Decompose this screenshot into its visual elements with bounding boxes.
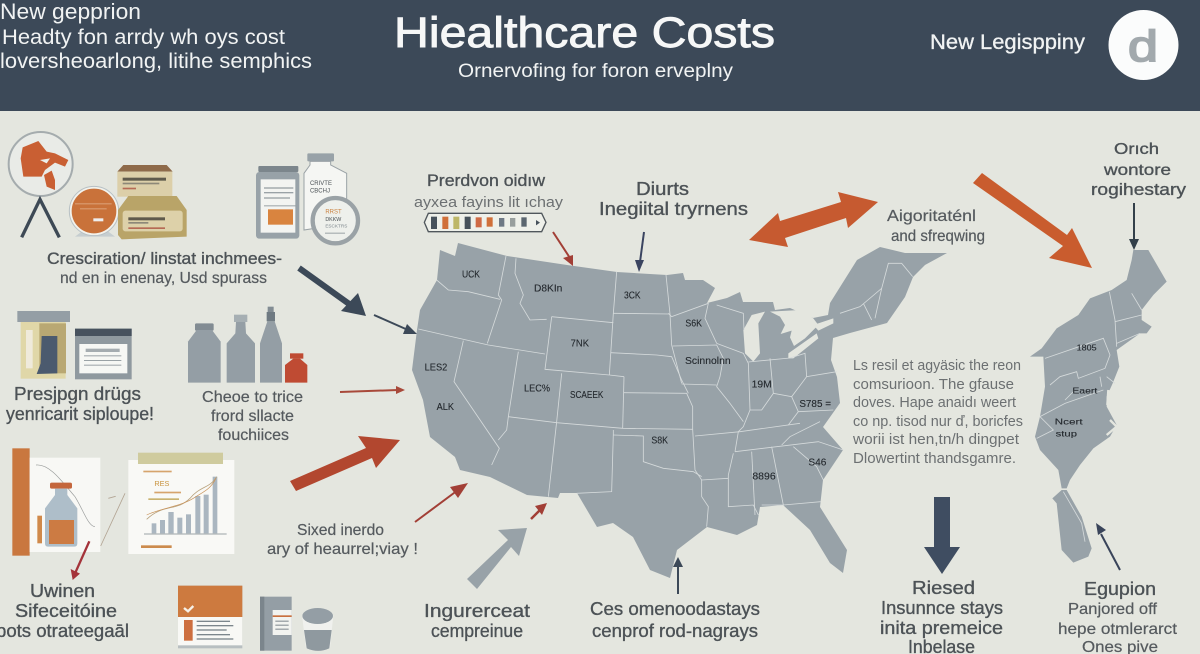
- caption: ingurerceat: cempreinue: [431, 620, 523, 641]
- map labels: 19M: [752, 380, 772, 391]
- caption: egupion: Panjored off: [1068, 601, 1158, 618]
- map silhouette: [412, 243, 947, 578]
- header left text: [0, 0, 312, 73]
- arrow: dark to florida: [1096, 523, 1120, 570]
- caption: top right: rogihestary: [1091, 180, 1187, 199]
- caption: top right: wontore: [1103, 162, 1171, 179]
- arrow: thin connector: [101, 493, 125, 546]
- icon: cardboard boxes: [117, 165, 187, 239]
- icon: row of bottles: [188, 307, 307, 383]
- florida shape: [1052, 490, 1092, 563]
- map labels: 3CK: [624, 290, 641, 301]
- paragraph: doves. Hape anaidı weert: [853, 394, 1017, 411]
- header left text: Headty fon arrdy wh oys cost: [2, 26, 285, 49]
- caption: diurts: Diurts: [636, 178, 689, 199]
- arrow: red to map southwest: [415, 483, 468, 522]
- arrow: thin red: [340, 386, 405, 394]
- icon: document panel: [75, 329, 132, 379]
- caption: choice: Cheoe to trice: [202, 389, 303, 406]
- map labels: S46: [808, 457, 827, 468]
- icon: line and bar chart card: RES: [154, 479, 170, 488]
- icon: round seal: ESCKTRS: [325, 224, 347, 229]
- caption: algorithm: and sfreqwing: [891, 228, 985, 245]
- icon: cup: [302, 608, 333, 651]
- arrow: large red: [290, 436, 400, 491]
- caption: top right: Orıch: [1114, 141, 1159, 158]
- icon: jar: [256, 166, 299, 239]
- caption: prerdvon with scale: Prerdvon oidıw: [427, 171, 546, 190]
- arrow: dark thick to map west: [299, 268, 366, 316]
- icon: vial card: [12, 448, 100, 556]
- icon: book: [260, 597, 292, 651]
- caption: uwinen: Uwinen: [30, 580, 95, 601]
- caption: choice: fouchiices: [218, 427, 289, 444]
- map labels: S8K: [651, 435, 668, 446]
- icon: checklist: [178, 586, 242, 648]
- map labels: LEC%: [524, 383, 550, 394]
- caption: ces omenoodastays: [590, 598, 760, 641]
- caption: ingurerceat: [424, 600, 530, 641]
- arrow: orange double: [749, 192, 878, 247]
- caption: prescription: [47, 249, 282, 287]
- icon group: vial card and chart: [12, 448, 234, 580]
- arrow: thin dark: [374, 315, 417, 334]
- caption: ingurerceat: Ingurerceat: [424, 600, 530, 621]
- east coast map: [1030, 250, 1167, 563]
- map labels: ALK: [437, 402, 454, 413]
- arrow: red to map north: [553, 232, 573, 266]
- east map labels: Ncert: [1055, 416, 1083, 426]
- caption: prescription drugs: Presjpgn drügs: [14, 383, 141, 404]
- paragraph: comsurioon. The gfause: [853, 376, 1014, 393]
- icon: bottle: CBCHJ: [310, 189, 330, 195]
- caption: riesed: Riesed: [912, 577, 975, 598]
- great lakes: [727, 281, 833, 362]
- arrow: red down: [71, 541, 89, 580]
- paragraph: co np. tisod nur ď, boricfes: [853, 413, 1023, 430]
- bottom captions: [424, 577, 1178, 654]
- map labels: S785 =: [799, 399, 831, 410]
- header band: [0, 0, 1200, 111]
- caption: prescription drugs: [6, 383, 154, 424]
- scale bar: [424, 213, 546, 232]
- subtitle: Ornervofing for foron erveplny: [458, 61, 734, 82]
- map labels: UCK: [462, 269, 480, 280]
- paragraph: [852, 357, 1023, 467]
- icon group: checklist, book, cup: [178, 586, 333, 651]
- northeast borders: [840, 263, 913, 320]
- eastern seaboard silhouette: [1030, 250, 1167, 488]
- caption: ces omenoodastays: Ces omenoodastays: [590, 598, 760, 619]
- logo circle: d: [1128, 22, 1158, 71]
- east map labels: 1805: [1077, 343, 1097, 353]
- arrow: dark to map north: [635, 232, 644, 272]
- east map labels: stup: [1056, 429, 1077, 439]
- icon group: jar and document: [17, 311, 132, 379]
- caption: riesed: [880, 577, 1003, 654]
- map labels: 7NK: [571, 339, 589, 350]
- caption: uwinen: [0, 580, 129, 641]
- caption: egupion: hepe otmlerarct: [1058, 621, 1178, 638]
- caption: sized: Sixed inerdo: [297, 522, 384, 539]
- caption: prescription: Cresciration/ linstat inchmees-: [47, 249, 282, 268]
- caption: uwinen: Sifeceitóine: [15, 600, 117, 621]
- icon: round seal: DKKW: [325, 217, 342, 223]
- caption: algorithm: [887, 208, 985, 245]
- icon group: magnifier and boxes: [9, 132, 187, 239]
- icon group: pill bottles: [256, 153, 358, 243]
- east map labels: Eaert: [1072, 385, 1098, 395]
- caption: sized: ary of heaurrel;viay !: [267, 541, 418, 558]
- state borders: [418, 256, 843, 527]
- caption: prescription drugs: yenricarit siploupe!: [6, 403, 154, 424]
- caption: ces omenoodastays: cenprof rod-nagrays: [592, 620, 758, 641]
- US map: [412, 243, 947, 578]
- title: Hiealthcare Costs: [394, 9, 775, 57]
- icon: jar with label: [17, 311, 70, 379]
- caption: riesed: Insunnce stays: [881, 597, 1003, 618]
- map labels: [425, 269, 831, 482]
- paragraph: Ls resil et agyäsic the reon: [853, 357, 1021, 374]
- caption: choice: frord sllacte: [211, 408, 294, 425]
- caption: algorithm: Aigoritaténl: [887, 208, 976, 225]
- caption: sized: [267, 522, 418, 558]
- arrow: orange diagonal: [973, 173, 1092, 268]
- header left text: loversheoarlong, litihe semphics: [0, 50, 312, 73]
- arrow: navy down: [924, 497, 960, 574]
- arrow: dark up to Texas: [673, 557, 683, 594]
- arrow: dark to maine: [1129, 203, 1139, 250]
- logo circle: [1108, 10, 1178, 80]
- icon: round label: [69, 186, 119, 237]
- map labels: Scinnolnn: [685, 356, 731, 367]
- caption: top right: [1091, 141, 1187, 199]
- icon: line and bar chart card: [128, 453, 234, 554]
- caption: prerdvon with scale: ayxea fayins lit ıchay: [414, 194, 564, 211]
- caption: prescription: nd en in enenay, Usd spurass: [60, 270, 267, 287]
- map labels: LES2: [425, 363, 448, 374]
- caption: diurts: [599, 178, 748, 219]
- arrow: short red: [531, 503, 547, 519]
- paragraph: worii ist hen,tn/h dingpet: [852, 431, 1020, 448]
- icon: bottle: CRIVTE: [310, 181, 332, 187]
- paragraph: Dlowertint thandsgamre.: [853, 450, 1016, 467]
- caption: diurts: Inegiital tɾyrnens: [599, 198, 748, 219]
- caption: riesed: inita premeice: [880, 617, 1003, 638]
- map labels: 8896: [752, 471, 776, 482]
- caption: prerdvon with scale: [414, 171, 564, 232]
- arrow: gray thick: [467, 528, 527, 589]
- map labels: SCAEEK: [570, 390, 604, 401]
- arrows: [290, 173, 1139, 594]
- icon: bottle: [304, 153, 347, 230]
- icon: round seal: [313, 198, 358, 243]
- icon: map magnifier: [9, 132, 73, 237]
- caption: egupion: [1058, 578, 1178, 654]
- icon: round seal: RRST: [325, 209, 342, 215]
- caption: choice: [202, 389, 303, 444]
- map labels: S6K: [685, 319, 702, 330]
- header right label: New Legisppiny: [930, 31, 1086, 54]
- east state borders: [1037, 292, 1142, 542]
- east map labels: [1055, 343, 1098, 439]
- coastal bays: [1107, 390, 1117, 435]
- caption: egupion: Egupion: [1084, 578, 1156, 599]
- map labels: D8KIn: [534, 283, 562, 294]
